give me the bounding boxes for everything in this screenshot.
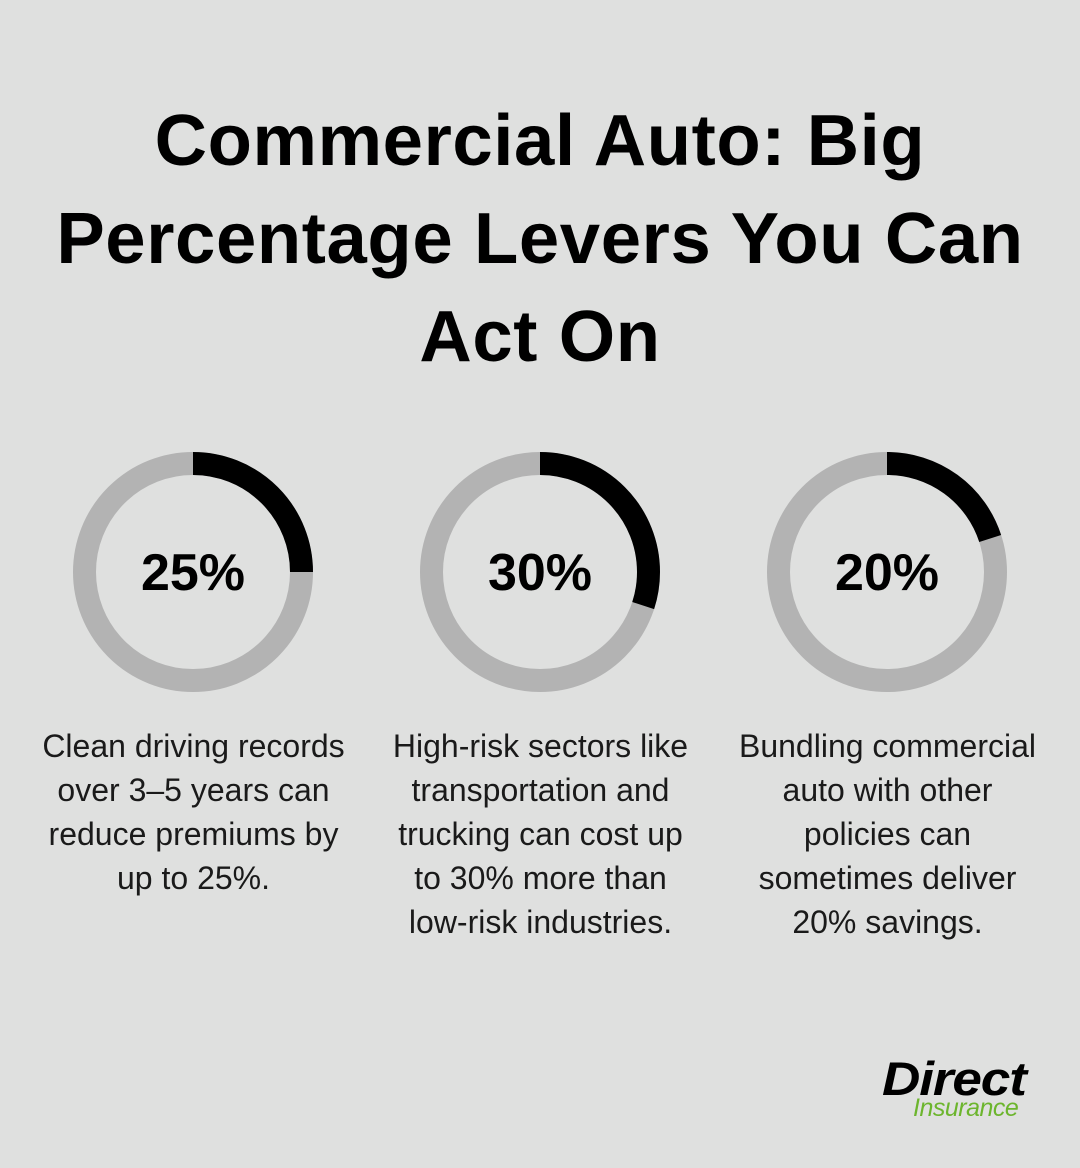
text: clean records: up to 25%.: [117, 860, 270, 896]
title: Act On: [419, 296, 661, 377]
text: clean records: reduce premiums by: [49, 816, 338, 852]
text: high-risk sectors: [393, 728, 688, 940]
title: Percentage Levers You Can: [56, 198, 1024, 279]
title: Commercial Auto: Big: [155, 100, 925, 181]
text: clean records: Clean driving records: [42, 728, 345, 764]
ring: 20%: 20%: [835, 544, 939, 602]
text: high-risk sectors: to 30% more than: [414, 860, 667, 896]
ring: 20%: [767, 452, 1007, 692]
text: high-risk sectors: low-risk industries.: [409, 904, 672, 940]
text: clean records: over 3–5 years can: [57, 772, 330, 808]
ring: 30%: [420, 452, 660, 692]
logo: Direct: [882, 1052, 1026, 1105]
title: [56, 100, 1024, 377]
ring: 25%: 25%: [141, 544, 245, 602]
text: bundling: auto with other: [783, 772, 992, 808]
text: high-risk sectors: trucking can cost up: [398, 816, 683, 852]
text: bundling: [739, 728, 1036, 940]
text: bundling: sometimes deliver: [759, 860, 1016, 896]
text: bundling: policies can: [804, 816, 971, 852]
logo: Insurance: [913, 1094, 1018, 1122]
ring: 25%: [73, 452, 313, 692]
text: clean records: [42, 728, 345, 896]
ring: 30%: 30%: [488, 544, 592, 602]
text: high-risk sectors: High-risk sectors like: [393, 728, 688, 764]
text: high-risk sectors: transportation and: [412, 772, 669, 808]
text: bundling: 20% savings.: [792, 904, 983, 940]
text: bundling: Bundling commercial: [739, 728, 1036, 764]
